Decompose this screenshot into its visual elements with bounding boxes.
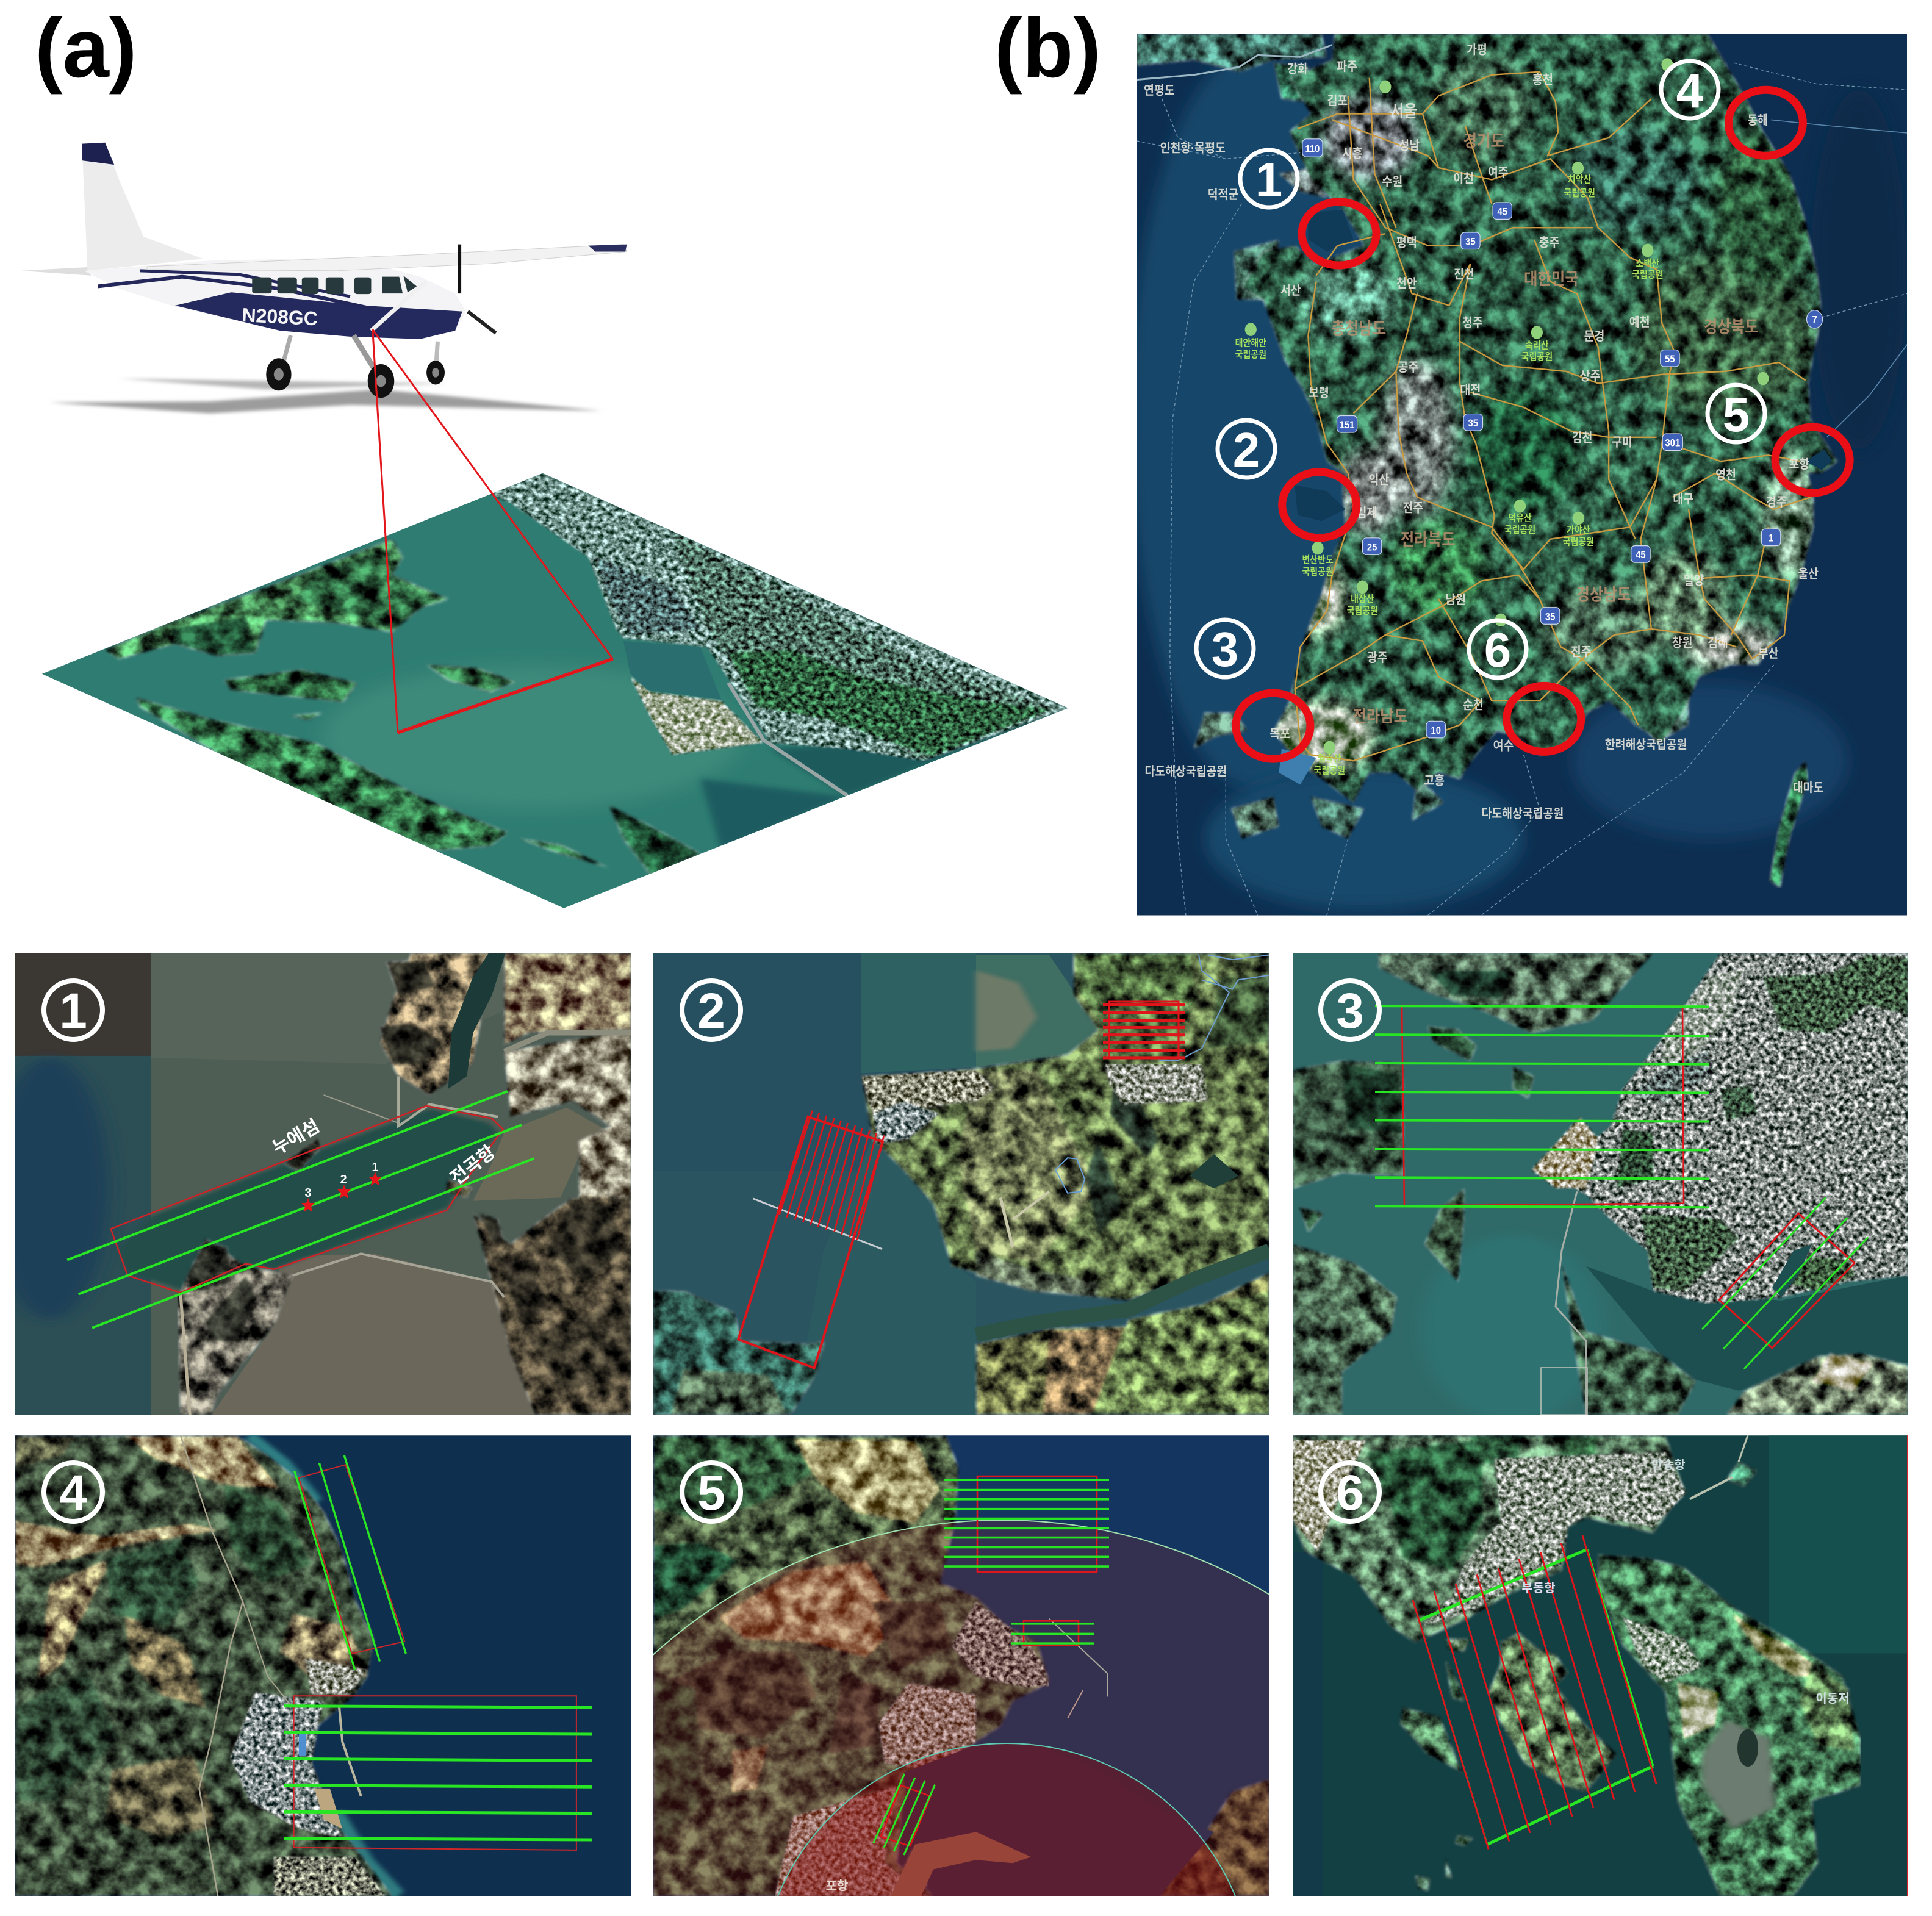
place label: 만송항 [1651, 1458, 1686, 1472]
west islet [1400, 1707, 1464, 1773]
city labels: 김해 [1708, 636, 1728, 650]
bridge [1690, 1477, 1733, 1499]
panel number 6 [1321, 1463, 1379, 1521]
place label: 이동저 [1815, 1692, 1850, 1706]
landing gear [266, 335, 445, 398]
province labels: 경상북도 [1704, 317, 1759, 336]
panel number 4 [44, 1463, 102, 1521]
park labels: 소백산 [1636, 258, 1659, 269]
south survey block [881, 1785, 930, 1846]
park labels: 국립공원 [1347, 606, 1378, 617]
city labels: 이천 [1453, 172, 1474, 186]
city labels: 남원 [1445, 593, 1466, 607]
city labels: 포항 [1789, 457, 1809, 472]
sampling points: 3 [304, 1186, 312, 1200]
main peninsula land [653, 1435, 1049, 1896]
city labels: 밀양 [1684, 573, 1704, 588]
city labels: 경주 [1766, 495, 1787, 509]
panel number 3 [1321, 981, 1379, 1039]
north survey block [299, 1465, 404, 1654]
city labels: 구미 [1612, 436, 1632, 450]
water of the aerial scene [42, 473, 1068, 908]
site number 6 on map: 6 [1484, 623, 1511, 677]
central island [1489, 1633, 1617, 1792]
lagoon [1702, 1720, 1775, 1829]
city labels: 김포 [1327, 94, 1348, 108]
city labels: 여주 [1488, 166, 1509, 180]
wing strut [371, 282, 426, 331]
small islets [1455, 1835, 1473, 1846]
park labels: 가야산 [1567, 525, 1590, 536]
panel number 2 [682, 981, 741, 1039]
site number 2 on map [1218, 420, 1275, 478]
south hatch lines [780, 1111, 884, 1240]
dark inner water of the bay [891, 1745, 1214, 1896]
city labels: 인천항·목평도 [1160, 141, 1226, 156]
upper flight lines [1375, 1006, 1709, 1207]
city labels: 보령 [1309, 386, 1329, 400]
site number 6 on map [1469, 620, 1526, 678]
park labels: 변산반도 [1302, 554, 1334, 565]
red flight lines [1413, 1535, 1656, 1849]
urban Pohang [878, 1682, 976, 1770]
breakwater [339, 1707, 361, 1796]
city labels: 파주 [1337, 60, 1357, 74]
coastal town [231, 1692, 342, 1838]
shield numbers [1305, 144, 1817, 736]
middle survey block [1024, 1621, 1079, 1645]
north survey block [977, 1476, 1097, 1572]
shield numbers: 1 [1769, 533, 1773, 544]
city labels: 덕적군 [1208, 188, 1238, 202]
park labels: 국립공원 [1235, 350, 1266, 360]
park labels: 속리산 [1525, 340, 1549, 351]
panel number 2: 2 [697, 983, 725, 1039]
shield numbers: 45 [1636, 550, 1646, 561]
survey boundary sides [1419, 1620, 1487, 1845]
north flight lines [944, 1480, 1109, 1566]
city labels: 창원 [1672, 636, 1692, 650]
province labels [1331, 131, 1759, 726]
city labels: 연평도 [1144, 84, 1175, 98]
sand beach [314, 1789, 342, 1829]
city labels: 광주 [1367, 651, 1388, 665]
sampling points: 2 [340, 1173, 347, 1186]
fuselage stripes [98, 277, 371, 309]
south survey block [738, 1117, 883, 1368]
sea [1137, 34, 1907, 915]
highway shields [1302, 139, 1823, 738]
bay and causeway [1556, 1191, 1586, 1415]
city labels: 홍천 [1532, 73, 1553, 87]
registration text: N208GC [242, 304, 318, 330]
city labels: 다도해상국립공원 [1481, 806, 1564, 821]
inner radius overlay [759, 1743, 1254, 1916]
city labels: 부산 [1758, 647, 1779, 661]
wing [147, 245, 627, 271]
province labels: 경상남도 [1576, 585, 1631, 604]
tan valleys [15, 1521, 218, 1568]
city labels: 전주 [1402, 501, 1423, 515]
park labels: 국립공원 [1302, 567, 1334, 578]
hill forest [1763, 955, 1908, 1033]
panel 6: site six flight lines [1293, 1435, 1908, 1896]
red survey site rings [1236, 90, 1850, 759]
city labels: 청주 [1462, 316, 1483, 330]
park labels: 국립공원 [1564, 188, 1595, 199]
inland pond [1190, 1154, 1238, 1188]
urban area [1550, 953, 1908, 1304]
site number 4 on map: 4 [1676, 63, 1704, 118]
harbour basin [623, 641, 721, 700]
city labels: 익산 [1369, 473, 1389, 487]
city labels: 문경 [1584, 329, 1604, 343]
river and boundary line [1137, 45, 1332, 80]
lower survey block [1719, 1213, 1855, 1348]
sea route dashes [1137, 63, 1907, 915]
label: panel b: (b) [994, 2, 1101, 95]
industrial waterfront and city [490, 473, 1068, 761]
city labels: 상주 [1580, 370, 1600, 384]
panel 4: site four flight lines [15, 1435, 631, 1896]
site number 1 on map: 1 [1255, 152, 1282, 207]
north flight lines [295, 1455, 406, 1670]
survey boundary [111, 1106, 503, 1293]
river [448, 953, 506, 1089]
outer radius overlay [483, 1520, 1520, 1916]
place label: 누에섬 [269, 1116, 323, 1158]
city labels: 진주 [1571, 645, 1592, 659]
south flight lines [874, 1774, 935, 1855]
national park markers [1245, 58, 1769, 754]
park labels: 국립공원 [1504, 525, 1535, 536]
aeroplane [21, 143, 627, 414]
breakwater lines [1049, 1619, 1107, 1696]
city labels: 예천 [1629, 315, 1650, 329]
aerial image: isometric survey scene [42, 473, 1068, 908]
harbour building [299, 1734, 306, 1756]
panel number 1: 1 [59, 983, 87, 1039]
city labels: 평택 [1396, 236, 1417, 250]
sea [1293, 1435, 1908, 1896]
park labels: 덕유산 [1508, 513, 1532, 524]
red edge line [1907, 1435, 1908, 1896]
south survey block [294, 1696, 576, 1850]
sampling points: 1 [372, 1161, 379, 1174]
propeller [458, 245, 461, 293]
city labels: 김천 [1572, 431, 1592, 445]
park labels: 치악산 [1568, 174, 1592, 185]
site number 4 on map [1661, 61, 1718, 118]
panel 2: site two flight lines [653, 953, 1269, 1415]
site number 2 on map: 2 [1233, 423, 1260, 477]
cabin windows [252, 276, 417, 294]
ground shadow [49, 379, 602, 414]
city labels: 여수 [1493, 739, 1514, 753]
east land [1598, 1555, 1861, 1896]
city labels: 목포 [1269, 727, 1290, 741]
port fill [1531, 1117, 1598, 1188]
sampling points [301, 1161, 382, 1212]
panel 5: site five flight lines [483, 1435, 1520, 1916]
north survey grid [1103, 1002, 1185, 1058]
water [15, 953, 631, 1415]
top and bottom boundary [1419, 1549, 1587, 1620]
city labels: 강화 [1287, 62, 1308, 76]
upper survey block [1402, 1005, 1684, 1206]
panel number 1 [44, 981, 102, 1039]
city labels: 서울 [1391, 102, 1417, 121]
city labels: 김제 [1357, 506, 1377, 520]
shield numbers: 35 [1468, 418, 1478, 429]
shield numbers: 45 [1497, 207, 1507, 218]
label: panel a: (a) [35, 2, 137, 95]
causeways and piers [293, 1254, 505, 1297]
mainland [1237, 34, 1843, 813]
sensor field of view lines [373, 329, 612, 733]
southeast land [1159, 1779, 1269, 1896]
northeast islet [1726, 1462, 1757, 1487]
tidal flat [976, 955, 1101, 1067]
panel number 6: 6 [1336, 1465, 1364, 1521]
bridge [728, 683, 847, 795]
city labels: 영천 [1715, 468, 1736, 483]
site number 3 on map: 3 [1212, 622, 1238, 676]
place label: 전곡항 [447, 1142, 499, 1189]
horizontal stabiliser [21, 267, 91, 276]
middle flight lines [1011, 1624, 1094, 1643]
province labels: 전라북도 [1401, 529, 1456, 549]
province labels: 대한민국 [1524, 269, 1579, 289]
river [976, 1250, 1269, 1335]
northwest islands [1137, 34, 1808, 888]
site number 5 on map [1708, 385, 1765, 442]
shield numbers: 25 [1367, 542, 1377, 553]
small islands [224, 670, 357, 702]
sea [653, 1435, 1269, 1896]
north land [1293, 1435, 1684, 1642]
water [1293, 953, 1908, 1415]
highway network [1295, 72, 1811, 761]
panel b: map of South Korea [1130, 34, 1907, 915]
water [653, 953, 1269, 1415]
shield numbers: 35 [1545, 612, 1556, 623]
panel 3: site three flight lines [1293, 953, 1908, 1422]
park labels: 국립공원 [1563, 537, 1594, 548]
panel number 5 [682, 1463, 741, 1521]
road [181, 1435, 243, 1896]
place label: 포항 [826, 1879, 848, 1893]
city labels [1144, 43, 1823, 821]
city labels: 충주 [1539, 236, 1559, 250]
urban Yeosu [1421, 1452, 1687, 1627]
city labels: 다도해상국립공원 [1144, 765, 1227, 779]
city labels: 수원 [1382, 174, 1402, 189]
shield numbers: 55 [1665, 354, 1675, 365]
lower flight lines [1702, 1197, 1868, 1369]
panel number 5: 5 [697, 1465, 725, 1521]
bay cut-outs inside red rings [1308, 210, 1354, 251]
coastal land [15, 1435, 392, 1896]
park labels: 내장산 [1351, 594, 1374, 605]
site number 1 on map [1240, 150, 1298, 207]
park labels [1235, 174, 1663, 777]
south spit [891, 1832, 1031, 1896]
city labels: 공주 [1398, 361, 1418, 375]
shield numbers: 151 [1340, 420, 1355, 431]
Tsushima island [1769, 761, 1808, 888]
white transect [753, 1199, 882, 1249]
panel number 3: 3 [1336, 983, 1364, 1039]
shield numbers: 7 [1812, 315, 1817, 326]
city labels: 진천 [1454, 268, 1474, 282]
city labels: 성남 [1399, 139, 1420, 153]
shield numbers: 110 [1305, 144, 1320, 155]
city labels: 동해 [1747, 113, 1768, 128]
inlet cutting the urban area [1772, 1244, 1812, 1297]
site number 5 on map: 5 [1723, 387, 1750, 442]
province labels: 충청남도 [1331, 319, 1386, 338]
park labels: 월출산 [1318, 753, 1341, 764]
park labels: 국립공원 [1314, 766, 1345, 777]
city labels: 대구 [1673, 492, 1693, 506]
blue boundaries [1055, 1158, 1085, 1193]
city labels: 서산 [1280, 284, 1301, 298]
lower-left long island [137, 698, 508, 850]
panel number 4: 4 [59, 1465, 87, 1521]
province labels: 경기도 [1463, 131, 1504, 151]
shield numbers: 35 [1465, 237, 1476, 248]
park labels: 국립공원 [1632, 270, 1663, 281]
site number 3 on map [1196, 620, 1254, 677]
city labels: 천안 [1396, 276, 1417, 291]
shield numbers: 301 [1665, 438, 1680, 449]
flight lines [67, 1091, 534, 1328]
panel 1: site one flight lines [0, 953, 631, 1415]
city labels: 대마도 [1793, 781, 1823, 795]
fuselage [84, 257, 465, 339]
city labels: 울산 [1798, 567, 1819, 581]
sea [15, 1435, 631, 1896]
reclaimed port land [630, 677, 763, 755]
city labels: 한려해상국립공원 [1605, 738, 1687, 752]
park labels: 태안해안 [1235, 338, 1266, 349]
place label: 부동항 [1521, 1581, 1556, 1595]
upper-left land of the aerial scene [105, 539, 448, 659]
city labels: 고흥 [1424, 773, 1445, 788]
city labels: 가평 [1467, 43, 1487, 57]
province labels: 전라남도 [1352, 706, 1407, 726]
city labels: 시흥 [1342, 146, 1363, 161]
shield numbers: 10 [1431, 725, 1441, 736]
airfield [1000, 1197, 1013, 1247]
park labels: 국립공원 [1521, 351, 1553, 362]
city labels: 대전 [1460, 383, 1481, 397]
fuselage navy belly [175, 292, 462, 339]
city labels: 순천 [1463, 698, 1484, 712]
south flight lines [284, 1706, 592, 1840]
tail fin [82, 143, 203, 271]
